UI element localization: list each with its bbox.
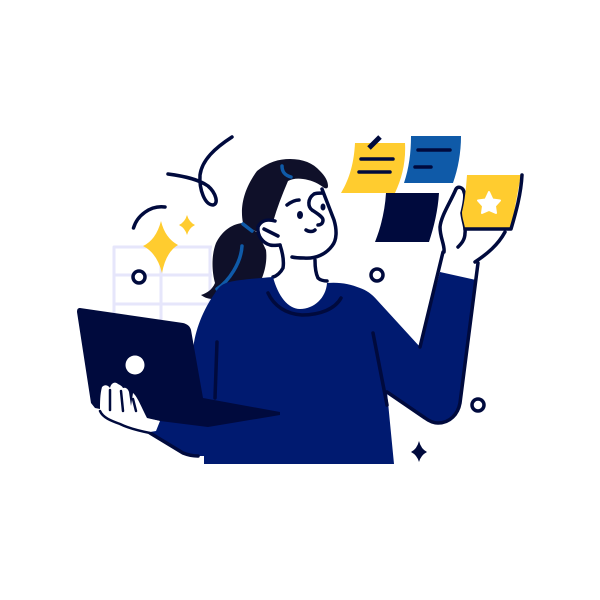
icon: white star <box>478 192 500 213</box>
ring right <box>472 399 484 411</box>
decorative squiggle <box>168 137 232 205</box>
sticky note: yellow with star, held in hand <box>462 175 522 229</box>
right hand outline <box>440 187 505 262</box>
ear <box>258 220 280 245</box>
icon: big yellow sparkle <box>143 221 178 273</box>
sticky note: blue with lines <box>404 136 461 183</box>
sticky note: yellow with lines <box>341 137 405 193</box>
laptop logo <box>126 356 144 374</box>
left sleeve <box>150 400 205 456</box>
face lines <box>273 189 336 281</box>
neck and face <box>258 179 336 309</box>
sticky note: dark <box>375 193 439 242</box>
icon: dark sparkle <box>411 441 427 462</box>
decorative arc <box>134 207 165 228</box>
background table grid <box>114 247 212 323</box>
laptop <box>77 308 280 427</box>
sweater lines <box>150 252 478 456</box>
hair top <box>242 159 328 232</box>
left hand <box>100 383 160 433</box>
icon: small yellow sparkle <box>179 215 195 235</box>
ring middle <box>371 269 383 281</box>
ring left <box>133 271 145 283</box>
sweater body <box>193 272 476 464</box>
hair highlights <box>217 166 291 289</box>
right hand <box>439 187 505 280</box>
eyes <box>297 204 326 219</box>
hair ponytail <box>201 223 266 299</box>
